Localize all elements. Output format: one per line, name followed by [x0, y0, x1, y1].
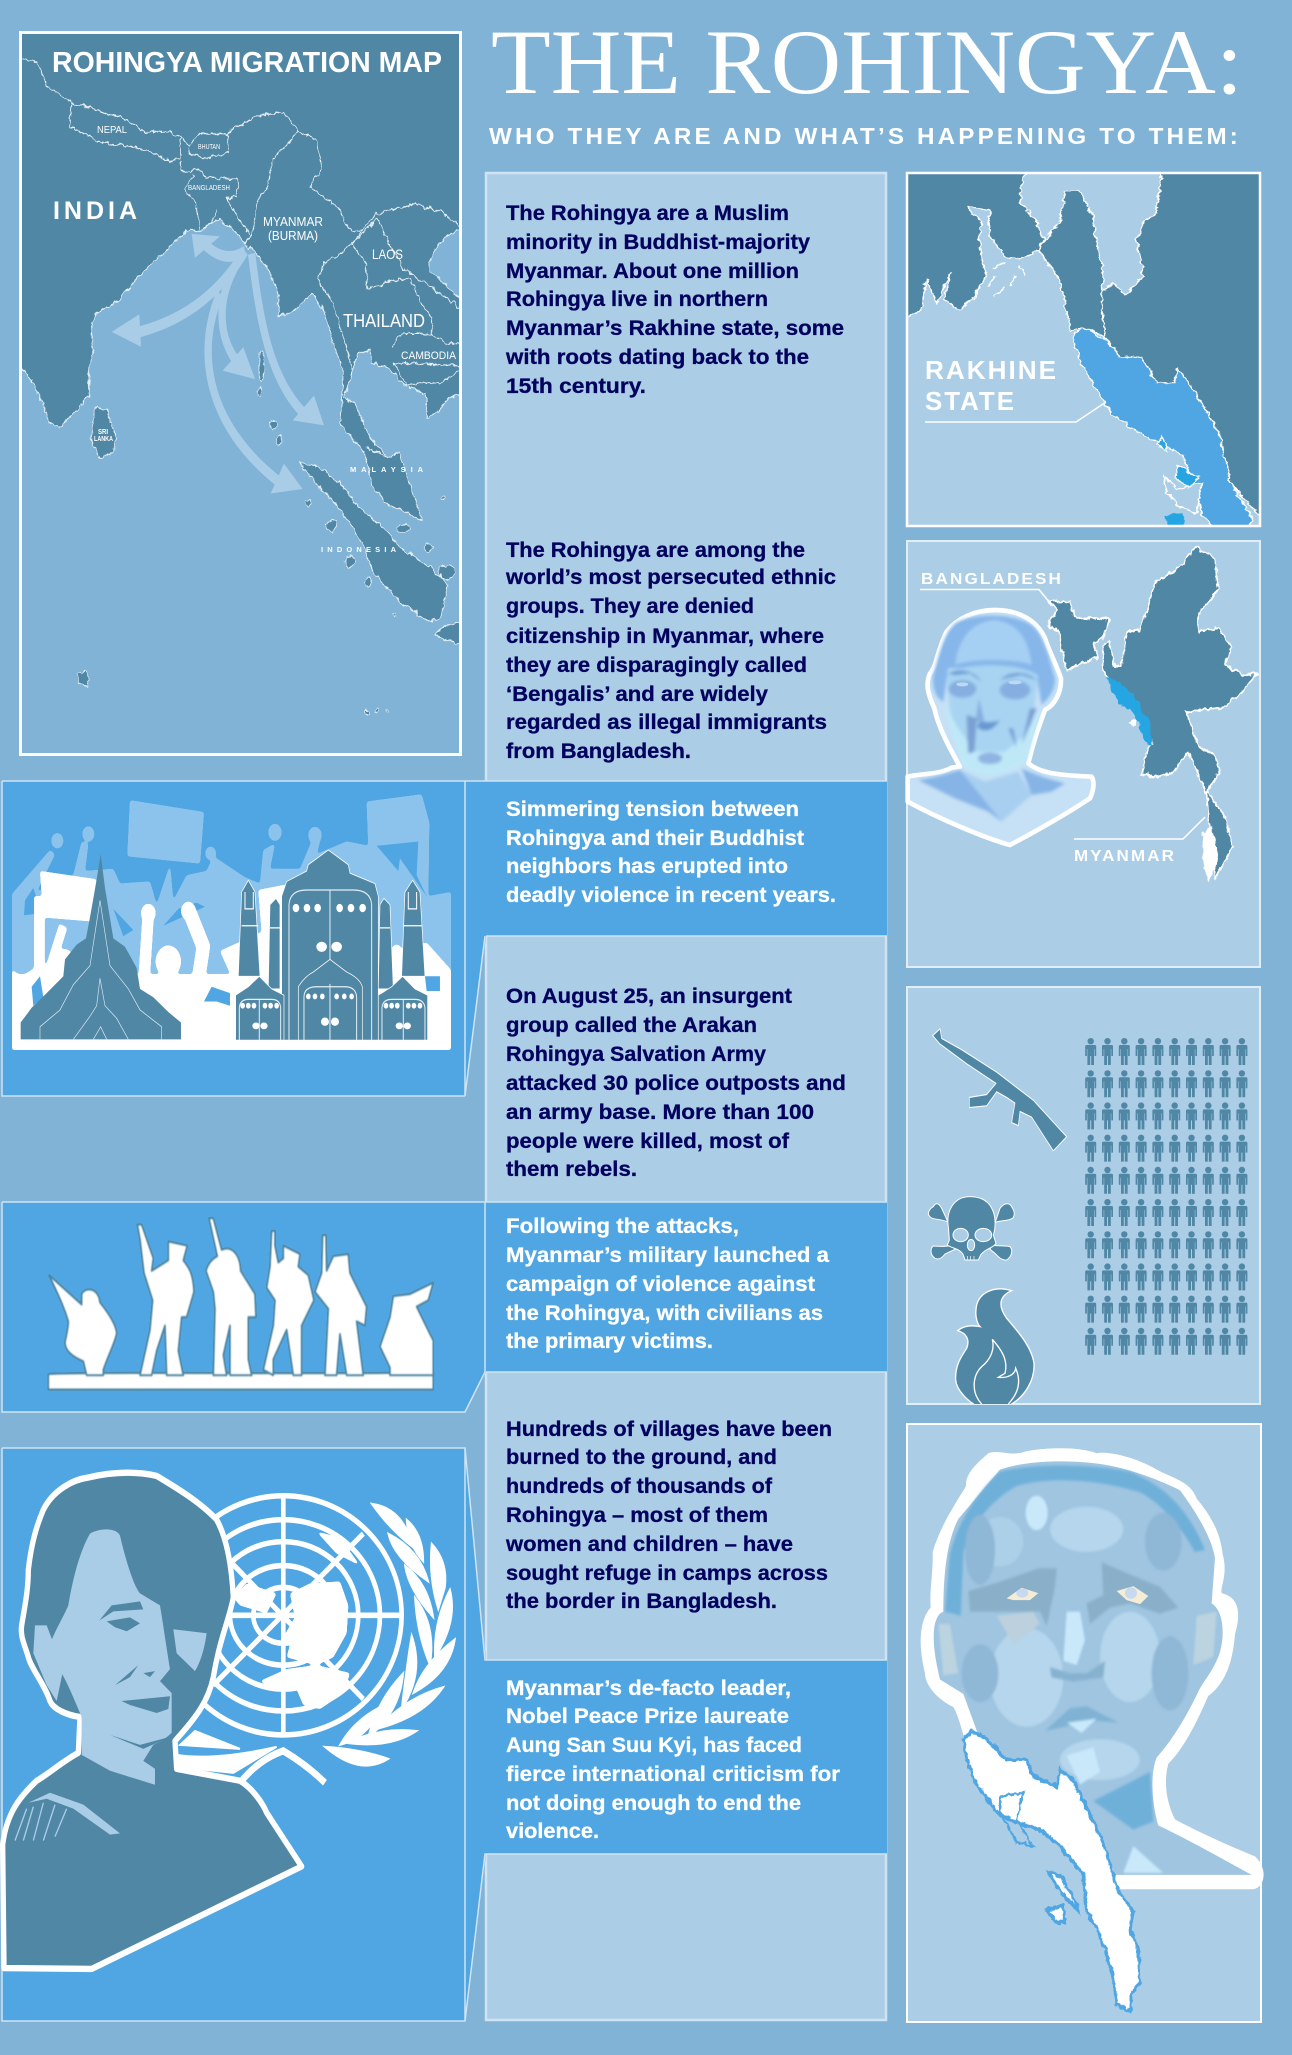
panel: Bangladesh and Myanmar map with portrait: [907, 541, 1260, 967]
text block: who the Rohingya are: 15th century.: [506, 375, 646, 398]
rear crowd: [12, 794, 451, 976]
panel: text column background: [486, 173, 886, 2020]
text block: persecution: ‘Bengalis’ and are widely: [506, 683, 768, 706]
text block: Aung San Suu Kyi: Myanmar’s de-facto leader,: [506, 1677, 791, 1700]
text block: persecution: world’s most persecuted ethnic: [505, 566, 836, 589]
text block: Aung San Suu Kyi: fierce international criticism for: [506, 1763, 840, 1786]
text block: August 25 attacks: attacked 30 police outposts and: [506, 1072, 846, 1095]
casualty icon grid: [1085, 1038, 1247, 1355]
text block: August 25 attacks: On August 25, an insurgent: [506, 985, 792, 1008]
map country labels: LANKA: [94, 436, 113, 443]
text block: military campaign: [506, 1215, 829, 1353]
map country labels: SRI: [98, 429, 108, 436]
text block: August 25 attacks: them rebels.: [506, 1158, 637, 1181]
soldier silhouettes: [48, 1218, 433, 1390]
text block: villages burned: sought refuge in camps across: [506, 1562, 828, 1585]
text block: August 25 attacks: an army base. More than 100: [506, 1101, 814, 1124]
mosque gate: [236, 850, 428, 1040]
portrait: [921, 1448, 1264, 1889]
label: Rakhine State: RAKHINE: [925, 355, 1058, 385]
panel: migration map: [13, 20, 467, 754]
label: Rakhine State: STATE: [925, 386, 1016, 416]
map country labels: INDIA: [53, 197, 137, 225]
labels: Bangladesh and Myanmar: [920, 571, 1205, 865]
panel: protest illustration: [2, 781, 887, 1096]
text block: villages burned: the border in Bangladesh.: [506, 1590, 777, 1613]
text block: villages burned: women and children – have: [505, 1533, 793, 1556]
map country labels: [53, 124, 457, 554]
text block: military campaign: Following the attacks,: [506, 1215, 739, 1238]
portrait: [3, 1473, 302, 1969]
text block: August 25 attacks: people were killed, most of: [506, 1130, 790, 1153]
UN emblem: [165, 1496, 402, 1735]
text block: August 25 attacks: group called the Arakan: [506, 1014, 757, 1037]
subtitle: WHO THEY ARE AND WHAT’S HAPPENING TO THEM:: [489, 123, 1241, 149]
text block: persecution: they are disparagingly called: [506, 654, 807, 677]
map title: ROHINGYA MIGRATION MAP: [52, 47, 442, 79]
panel: soldiers illustration: [2, 1202, 887, 1412]
text block: August 25 attacks: [506, 985, 846, 1181]
Rakhine silhouette: [963, 1731, 1140, 2011]
text block: who the Rohingya are: Myanmar. About one million: [506, 260, 799, 283]
labels: Bangladesh and Myanmar: MYANMAR: [1074, 848, 1176, 865]
icon: flame: [956, 1289, 1034, 1405]
text block: military campaign: the primary victims.: [506, 1330, 713, 1353]
panel: Aung San Suu Kyi and UN emblem: [2, 1448, 887, 2021]
title: THE ROHINGYA:: [491, 11, 1243, 113]
text block: simmering tension: deadly violence in recent years.: [506, 884, 836, 907]
text block: Aung San Suu Kyi: not doing enough to end the: [506, 1792, 801, 1815]
text block: simmering tension: [506, 798, 836, 907]
text block: persecution: regarded as illegal immigrants: [506, 711, 827, 734]
map country labels: THAILAND: [343, 311, 425, 331]
map country labels: NEPAL: [97, 124, 127, 136]
text block: who the Rohingya are: minority in Buddhist-majority: [506, 231, 810, 254]
text block: who the Rohingya are: [505, 202, 844, 398]
text block: Aung San Suu Kyi: [506, 1677, 840, 1843]
map country labels: INDONESIA: [321, 545, 397, 554]
map country labels: MALAYSIA: [350, 465, 424, 474]
text block: August 25 attacks: Rohingya Salvation Army: [506, 1043, 766, 1066]
text block: persecution: from Bangladesh.: [506, 740, 691, 763]
pagoda: [21, 854, 181, 1039]
text block: who the Rohingya are: with roots dating back to the: [505, 346, 809, 369]
text block: Aung San Suu Kyi: Aung San Suu Kyi, has faced: [506, 1734, 802, 1757]
map country labels: MYANMAR: [263, 214, 323, 229]
panel: attack icons and casualties: [907, 987, 1260, 1405]
laurel wreath: [177, 1504, 455, 1783]
text block: villages burned: [505, 1418, 832, 1613]
panel: child portrait with Rakhine silhouette: [907, 1424, 1264, 2022]
text block: villages burned: Rohingya – most of them: [506, 1504, 768, 1527]
old man portrait: [908, 610, 1093, 845]
map country labels: CAMBODIA: [401, 350, 457, 362]
labels: Bangladesh and Myanmar: BANGLADESH: [921, 571, 1063, 588]
text block: Aung San Suu Kyi: violence.: [506, 1820, 599, 1843]
text block: persecution: citizenship in Myanmar, where: [506, 625, 824, 648]
icon: rifle: [933, 1029, 1067, 1151]
text block: who the Rohingya are: Rohingya live in northern: [506, 288, 768, 311]
text block: who the Rohingya are: The Rohingya are a Muslim: [506, 202, 789, 225]
text block: persecution: The Rohingya are among the: [506, 539, 805, 562]
text block: villages burned: hundreds of thousands of: [506, 1475, 773, 1498]
map country labels: (BURMA): [268, 228, 318, 243]
text block: persecution: groups. They are denied: [506, 595, 754, 618]
text block: villages burned: burned to the ground, and: [506, 1446, 777, 1469]
map country labels: BHUTAN: [198, 142, 220, 151]
icon: skull and crossbones: [928, 1197, 1014, 1260]
country silhouettes: [1048, 547, 1258, 881]
text block: simmering tension: Simmering tension between: [506, 798, 799, 821]
arrows: migration routes: [112, 234, 324, 494]
text block: military campaign: campaign of violence against: [506, 1273, 815, 1296]
text block: simmering tension: Rohingya and their Buddhist: [506, 827, 804, 850]
text block: military campaign: Myanmar’s military launched a: [506, 1244, 829, 1267]
text block: persecution: [505, 539, 836, 763]
text block: villages burned: Hundreds of villages have been: [506, 1418, 832, 1441]
front crowd: [12, 871, 451, 1050]
map country labels: BANGLADESH: [188, 183, 230, 192]
text block: Aung San Suu Kyi: Nobel Peace Prize laureate: [506, 1705, 789, 1728]
label: Rakhine State: [925, 355, 1106, 422]
text block: simmering tension: neighbors has erupted into: [506, 855, 788, 878]
text block: who the Rohingya are: Myanmar’s Rakhine state, some: [506, 317, 844, 340]
panel: Rakhine State map: [895, 166, 1272, 531]
text block: military campaign: the Rohingya, with civilians as: [506, 1302, 823, 1325]
map country labels: LAOS: [372, 246, 403, 262]
